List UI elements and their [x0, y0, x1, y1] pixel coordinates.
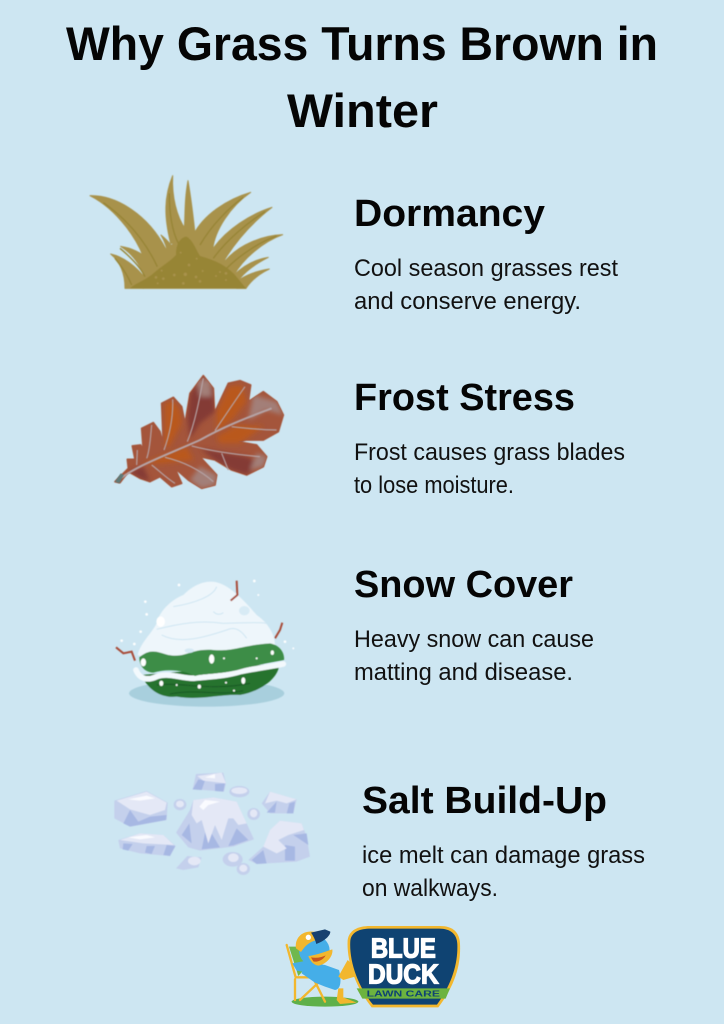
snow band — [136, 664, 283, 679]
heading: Snow Cover: Snow Cover — [354, 564, 573, 606]
lower foliage — [142, 663, 279, 698]
text: Dormancy description: and conserve energy. — [354, 288, 581, 315]
icon: frosted oak leaf — [115, 376, 283, 488]
icon: salt and ice chunks — [114, 773, 310, 875]
text: Dormancy description — [354, 255, 618, 315]
heading: Frost Stress: Frost Stress — [354, 377, 575, 419]
text: Snow Cover description: Heavy snow can cause — [354, 626, 594, 653]
text: Frost Stress description — [354, 439, 625, 499]
text: Frost Stress description: to lose moisture. — [354, 472, 514, 499]
upper foliage — [139, 643, 284, 676]
title — [66, 17, 658, 137]
text: Snow Cover description: matting and disease. — [354, 659, 573, 686]
snow mound — [138, 582, 275, 663]
heading: Salt Build-Up: Salt Build-Up — [362, 780, 607, 822]
text: Snow Cover description — [354, 626, 594, 686]
badge — [348, 926, 460, 1007]
logo: Blue Duck Lawn Care — [287, 926, 460, 1007]
text: Salt Build-Up description: ice melt can damage grass — [362, 842, 645, 869]
shadow — [129, 680, 284, 707]
text: Salt Build-Up description: on walkways. — [362, 875, 498, 902]
title: Winter — [287, 84, 438, 137]
icon: duck mascot in chair — [287, 929, 358, 1007]
badge: DUCK — [368, 958, 439, 989]
title: Why Grass Turns Brown in — [66, 17, 658, 70]
text: Frost Stress description: Frost causes grass blades — [354, 439, 625, 466]
heading: Dormancy: Dormancy — [354, 193, 545, 235]
icon: dormant grass tuft — [90, 176, 283, 288]
badge: LAWN CARE — [367, 989, 441, 998]
text: Dormancy description: Cool season grasses rest — [354, 255, 618, 282]
text: Salt Build-Up description — [362, 842, 645, 902]
twigs — [116, 581, 282, 661]
icon: snow covered shrub — [116, 580, 294, 707]
badge: BLUE — [371, 932, 436, 963]
